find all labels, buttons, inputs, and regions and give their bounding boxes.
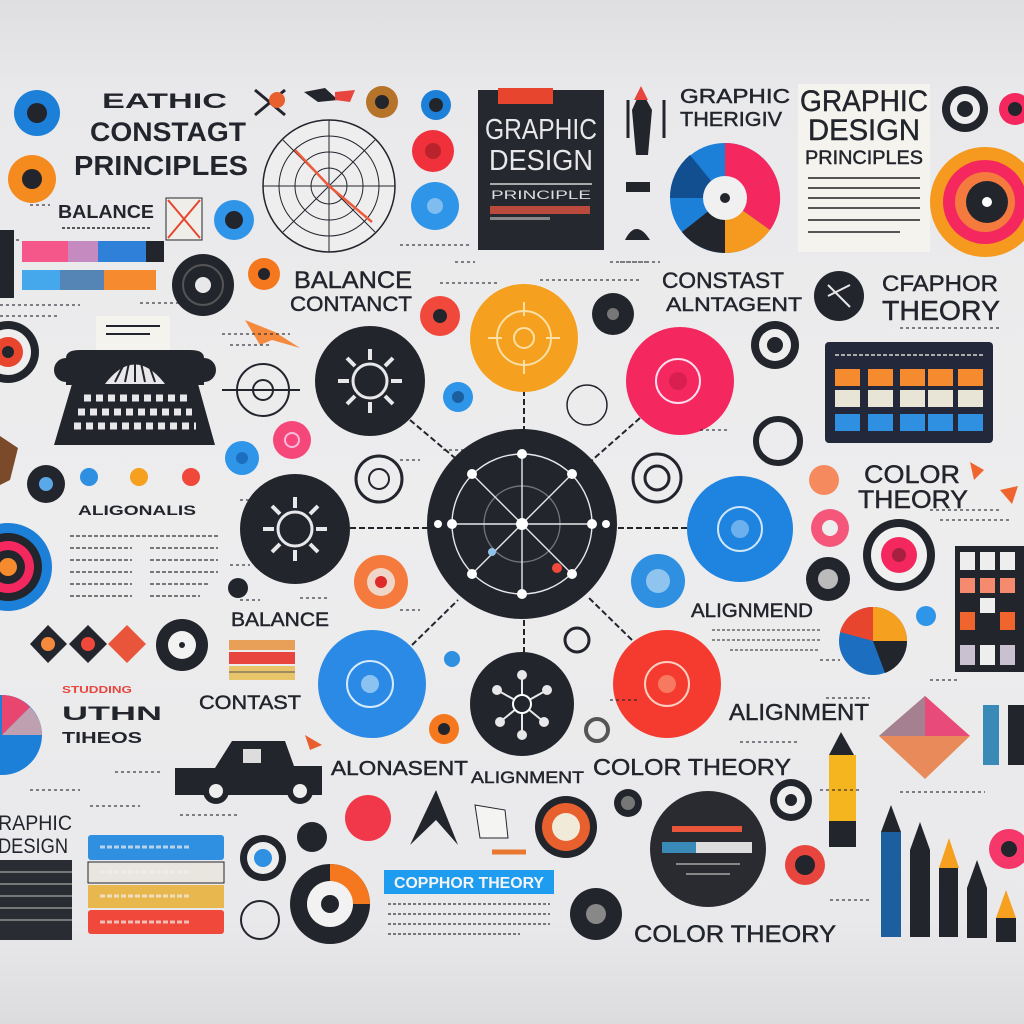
dark screen circle	[650, 791, 766, 907]
poster: graphic design: GRAPHIC	[485, 114, 597, 146]
colour wheel top	[670, 143, 780, 253]
poster: graphic design	[478, 88, 604, 250]
radar target chart	[263, 120, 395, 252]
book stack	[88, 835, 224, 934]
label: alignment text block: ALIGONALIS	[78, 502, 196, 518]
dashboard panel	[825, 342, 993, 443]
circle icons right middle	[354, 465, 850, 609]
balance label and swatches: BALANCE	[58, 202, 154, 222]
node: orange	[470, 284, 578, 392]
garbled text block left	[62, 685, 162, 747]
poster: graphic design: PRINCIPLE	[491, 188, 591, 202]
label: alignment right: ALIGNMEND	[691, 601, 813, 622]
heading: graphor theory	[882, 271, 1000, 326]
heading: color theory right	[858, 461, 968, 514]
heading: balance contact: BALANCE	[294, 267, 412, 294]
node: blue right	[687, 476, 793, 582]
heading: balance contact	[290, 267, 412, 316]
label: alignment right	[691, 601, 820, 650]
outline rings middle	[356, 385, 800, 502]
poster: graphic design: DESIGN	[489, 145, 593, 177]
card: graphic design principles: GRAPHIC	[800, 85, 928, 118]
node: dark left	[240, 474, 350, 584]
heading: contrast principles: PRINCIPLES	[74, 150, 248, 181]
label: alignment text block	[70, 502, 218, 596]
orange donut chart	[290, 864, 370, 944]
alignment labels row: ALIGNMENT	[471, 768, 584, 787]
heading: graphic theory: THERIGIV	[680, 109, 783, 131]
central network connector lines	[350, 390, 688, 655]
colour stack left middle	[229, 640, 295, 680]
heading: constast alntagent: ALNTAGENT	[666, 295, 802, 316]
card: graphic design principles	[798, 84, 930, 252]
card: graphic design principles: DESIGN	[808, 114, 920, 147]
pink target right	[863, 519, 935, 591]
small circular icons upper middle	[225, 258, 864, 475]
label: balance: BALANCE	[231, 610, 329, 631]
vinyl disc	[172, 254, 234, 316]
pencils and tubes right	[983, 705, 1024, 765]
small coloured dots row	[27, 465, 200, 503]
label: copphor theory	[384, 870, 554, 894]
orange ring icon	[535, 796, 597, 858]
label: copphor theory: COPPHOR THEORY	[394, 875, 544, 892]
node: dark upper left	[315, 326, 425, 436]
graphic design corner poster: RAPHIC	[0, 812, 72, 835]
colour kite	[879, 696, 970, 779]
scattered micro text marks	[0, 205, 1010, 900]
balance label and swatches	[22, 202, 164, 290]
concentric rainbow left	[0, 523, 52, 611]
graphic design corner poster	[0, 812, 72, 940]
heading: constast alntagent	[662, 268, 802, 316]
heading: color theory right: THEORY	[858, 486, 968, 514]
alignment labels row: ALONASENT	[331, 758, 468, 780]
heading: contrast principles	[74, 90, 248, 181]
pen nib sketch	[410, 790, 458, 845]
pie chart right	[839, 607, 907, 675]
node: dark bottom	[470, 652, 574, 756]
heading: balance contact: CONTANCT	[290, 293, 412, 316]
round icons bottom	[240, 714, 1024, 939]
target top right	[930, 147, 1024, 257]
pencil set	[881, 805, 1016, 942]
central hub diagram	[427, 429, 617, 619]
small accent icons	[0, 86, 1018, 852]
yellow pencil	[829, 732, 856, 847]
target icon beside typewriter	[222, 364, 300, 416]
alignment labels row	[331, 758, 584, 787]
diamond icons	[30, 625, 146, 663]
label: contrast: CONTAST	[199, 693, 301, 714]
heading: constast alntagent: CONSTAST	[662, 268, 784, 293]
mini poster	[166, 198, 202, 240]
target left	[0, 321, 39, 383]
text lines under label	[388, 904, 550, 934]
colour fan left	[0, 695, 42, 775]
heading: contrast principles: EATHIC	[102, 90, 227, 113]
garbled text block left: UTHN	[62, 704, 162, 725]
vinyl disc lower	[156, 619, 208, 671]
dark disc icon	[570, 888, 622, 940]
node: pink	[626, 327, 734, 435]
truck silhouette	[175, 741, 322, 804]
heading: graphor theory: THEORY	[882, 295, 1000, 326]
top right ring icons	[942, 86, 1024, 132]
node: blue left	[318, 630, 426, 738]
node: red	[613, 630, 721, 738]
colour grid right	[955, 546, 1024, 672]
typewriter	[54, 316, 216, 445]
top left button icons	[8, 86, 459, 240]
garbled text block left: STUDDING	[62, 685, 132, 696]
heading: graphor theory: CFAPHOR	[882, 271, 998, 296]
heading: contrast principles: CONSTAGT	[90, 117, 247, 147]
heading: graphic theory: GRAPHIC	[680, 86, 790, 108]
heading: color theory right: COLOR	[864, 461, 960, 489]
heading: color theory bottom: COLOR THEORY	[634, 921, 836, 948]
heading: alignment right: ALIGNMENT	[729, 699, 869, 725]
heading: color theory middle: COLOR THEORY	[593, 754, 791, 780]
card: graphic design principles: PRINCIPLES	[805, 148, 923, 169]
heading: graphic theory	[680, 86, 790, 131]
garbled text block left: TIHEOS	[62, 730, 142, 747]
graphic design corner poster: DESIGN	[0, 835, 68, 858]
